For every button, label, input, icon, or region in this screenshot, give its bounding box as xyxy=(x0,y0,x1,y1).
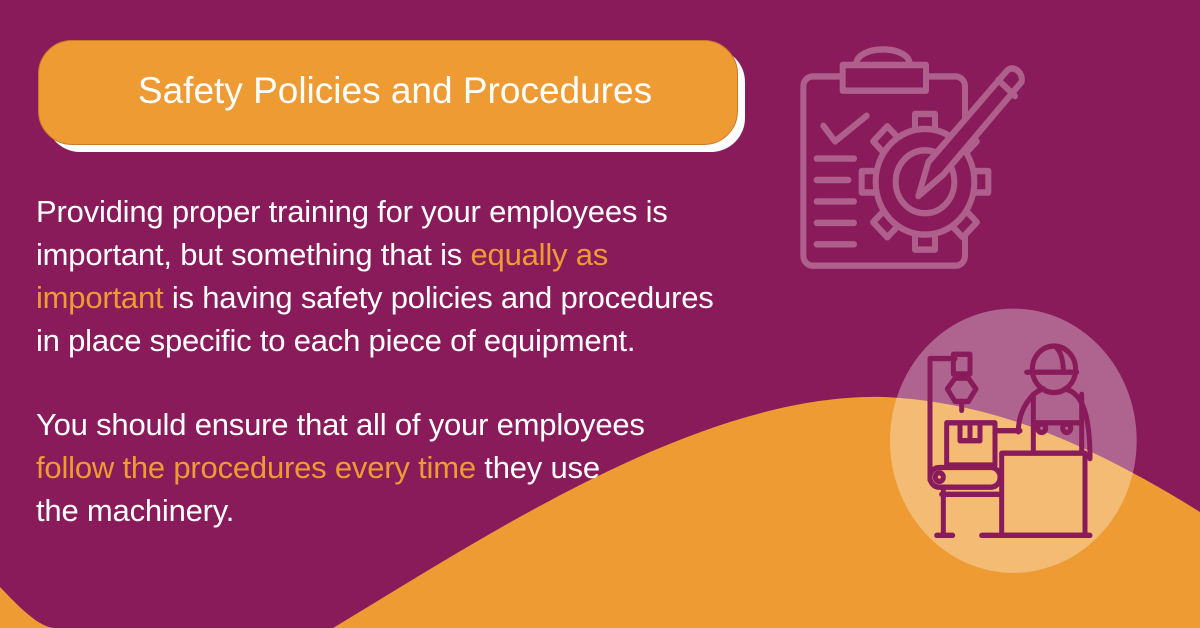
text block: paragraph 2 xyxy=(36,407,645,528)
icon: worker at machine in circle xyxy=(890,308,1137,573)
text block: paragraph 1 xyxy=(36,194,714,358)
text block: paragraph 1: important, but something that is equally as xyxy=(36,237,608,272)
text block: paragraph 1: important is having safety policies and procedures xyxy=(36,280,714,315)
icon: clipboard with gear and pencil xyxy=(800,46,1025,269)
text block: paragraph 2: You should ensure that all of your employees xyxy=(36,407,645,442)
title banner xyxy=(38,40,745,152)
text block: paragraph 2: the machinery. xyxy=(36,493,234,528)
text block: paragraph 1: in place specific to each piece of equipment. xyxy=(36,323,635,358)
text block: paragraph 2: follow the procedures every time they use xyxy=(36,450,600,485)
text block: paragraph 1: Providing proper training for your employees is xyxy=(36,194,668,229)
title: Safety Policies and Procedures xyxy=(138,70,652,111)
